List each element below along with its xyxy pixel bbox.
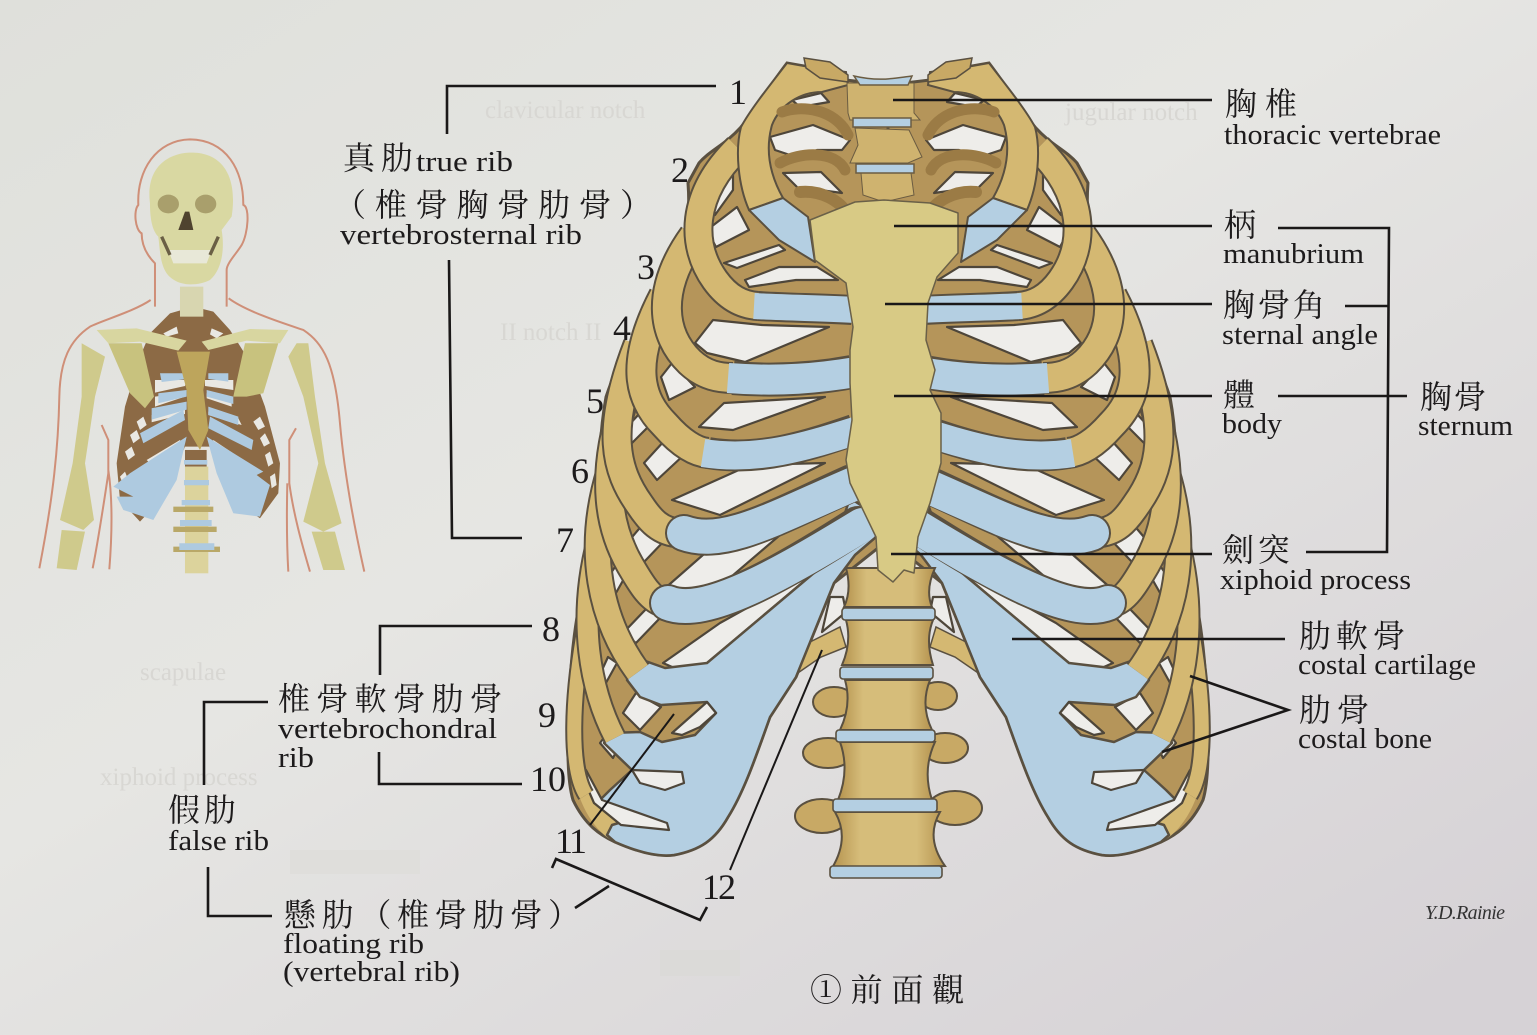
artist signature: Y.D.Rainie bbox=[1425, 902, 1505, 924]
label: manubrium: manubrium bbox=[1223, 239, 1364, 270]
label: xiphoid process bbox=[1220, 532, 1411, 596]
label: false rib: 假肋 bbox=[168, 792, 236, 828]
ribcage bbox=[113, 307, 280, 522]
rib 5 bbox=[617, 345, 680, 533]
label: costal cartilage: 肋軟骨 bbox=[1299, 618, 1405, 654]
label: floating rib bbox=[283, 897, 580, 988]
label: vertebrochondral rib: vertebrochondral bbox=[278, 714, 497, 745]
skull bbox=[149, 153, 233, 284]
rib numbers: 11 bbox=[555, 821, 587, 861]
rib numbers: 2 bbox=[671, 150, 689, 190]
label: thoracic vertebrae: thoracic vertebrae bbox=[1224, 120, 1441, 151]
label: sternum: sternum bbox=[1418, 411, 1513, 442]
label: costal cartilage bbox=[1298, 618, 1476, 681]
label: costal bone bbox=[1298, 692, 1432, 755]
label: true rib: true rib bbox=[416, 147, 513, 178]
rib numbers: 9 bbox=[538, 695, 556, 735]
label: sternal angle: sternal angle bbox=[1222, 320, 1378, 351]
slot B bbox=[584, 770, 669, 830]
label: costal bone: costal bone bbox=[1298, 724, 1432, 755]
label: xiphoid process: xiphoid process bbox=[1220, 565, 1411, 596]
label: true rib: vertebrosternal rib bbox=[340, 220, 582, 251]
label: floating rib: floating rib bbox=[283, 929, 424, 960]
rib numbers: 5 bbox=[586, 381, 604, 421]
shoulder girdle and sternum bbox=[97, 328, 288, 450]
label: body: body bbox=[1222, 409, 1282, 440]
label: body bbox=[1222, 377, 1282, 440]
label: floating rib: (vertebral rib) bbox=[283, 957, 460, 988]
rib 1 with cartilage bbox=[738, 63, 848, 210]
faint show-through text from reverse page: jugular notch bbox=[1064, 99, 1198, 126]
rib numbers bbox=[530, 72, 747, 907]
rib numbers: 6 bbox=[571, 451, 589, 491]
leader lines bbox=[204, 86, 1407, 920]
rib 6 bbox=[609, 400, 664, 603]
spine bbox=[795, 76, 982, 878]
rib 2 bbox=[698, 148, 758, 306]
windows between ribs bbox=[792, 93, 829, 107]
rib numbers: 8 bbox=[542, 609, 560, 649]
label: false rib bbox=[168, 792, 269, 857]
main rib cage: right half (mirrored) bbox=[888, 58, 1208, 855]
lower vertebral bodies bbox=[832, 568, 945, 868]
silhouette bbox=[568, 63, 888, 855]
label: sternum: 胸骨 bbox=[1420, 379, 1486, 415]
label: costal bone: 肋骨 bbox=[1299, 692, 1369, 728]
main rib cage: left half bbox=[568, 58, 888, 855]
label: true rib: （椎骨胸骨肋骨） bbox=[334, 187, 652, 223]
label: floating rib: 懸肋（椎骨肋骨） bbox=[284, 897, 580, 933]
label: body: 體 bbox=[1223, 377, 1255, 413]
faint show-through text from reverse page: xiphoid process bbox=[100, 764, 258, 791]
rib numbers: 4 bbox=[613, 308, 631, 348]
label: thoracic vertebrae: 胸椎 bbox=[1225, 86, 1297, 122]
faint show-through text from reverse page: II notch II bbox=[500, 319, 601, 346]
faint show-through text from reverse page bbox=[100, 97, 1198, 976]
faint show-through text from reverse page: scapulae bbox=[140, 659, 226, 686]
arms bbox=[57, 343, 345, 570]
label: true rib bbox=[334, 140, 652, 251]
rib numbers: 3 bbox=[637, 247, 655, 287]
label: false rib: false rib bbox=[168, 826, 269, 857]
figure caption: ①前面觀 bbox=[810, 972, 964, 1008]
transverse processes bbox=[795, 682, 982, 833]
label: manubrium: 柄 bbox=[1224, 207, 1256, 243]
faint show-through text from reverse page: clavicular notch bbox=[485, 97, 646, 124]
slot A bbox=[632, 770, 684, 790]
label: sternal angle bbox=[1222, 287, 1378, 351]
rib 12 bbox=[792, 627, 846, 677]
rib numbers: 12 bbox=[702, 867, 736, 907]
tan lower rib area bbox=[571, 745, 625, 842]
body outline bbox=[39, 139, 364, 572]
rib numbers: 1 bbox=[729, 72, 747, 112]
label: sternum bbox=[1418, 379, 1513, 442]
label: vertebrochondral rib: 椎骨軟骨肋骨 bbox=[278, 681, 502, 717]
hole by rib 11 bbox=[672, 702, 716, 735]
rib numbers: 7 bbox=[556, 520, 574, 560]
rib numbers: 10 bbox=[530, 759, 566, 799]
intervertebral discs bbox=[830, 608, 942, 878]
sternum bbox=[810, 200, 958, 582]
label: costal cartilage: costal cartilage bbox=[1298, 650, 1476, 681]
label: sternal angle: 胸骨角 bbox=[1223, 287, 1325, 323]
clavicle stub bbox=[804, 58, 848, 82]
spine bbox=[173, 287, 220, 573]
rib 3 bbox=[667, 236, 733, 378]
label: manubrium bbox=[1223, 207, 1364, 270]
small full-torso skeleton figure bbox=[39, 139, 364, 573]
rib 4 bbox=[641, 296, 708, 453]
rib heads bbox=[780, 109, 848, 215]
label: thoracic vertebrae bbox=[1224, 86, 1441, 151]
big costal margin cartilage bbox=[600, 498, 876, 855]
label: xiphoid process: 劍突 bbox=[1222, 532, 1290, 568]
label: vertebrochondral rib bbox=[278, 681, 502, 774]
upper thoracic vertebrae bbox=[847, 83, 922, 202]
lateral ribs 7 to 9 bbox=[574, 610, 588, 795]
label: vertebrochondral rib: rib bbox=[278, 743, 314, 774]
label: true rib: 真肋 bbox=[343, 140, 413, 176]
